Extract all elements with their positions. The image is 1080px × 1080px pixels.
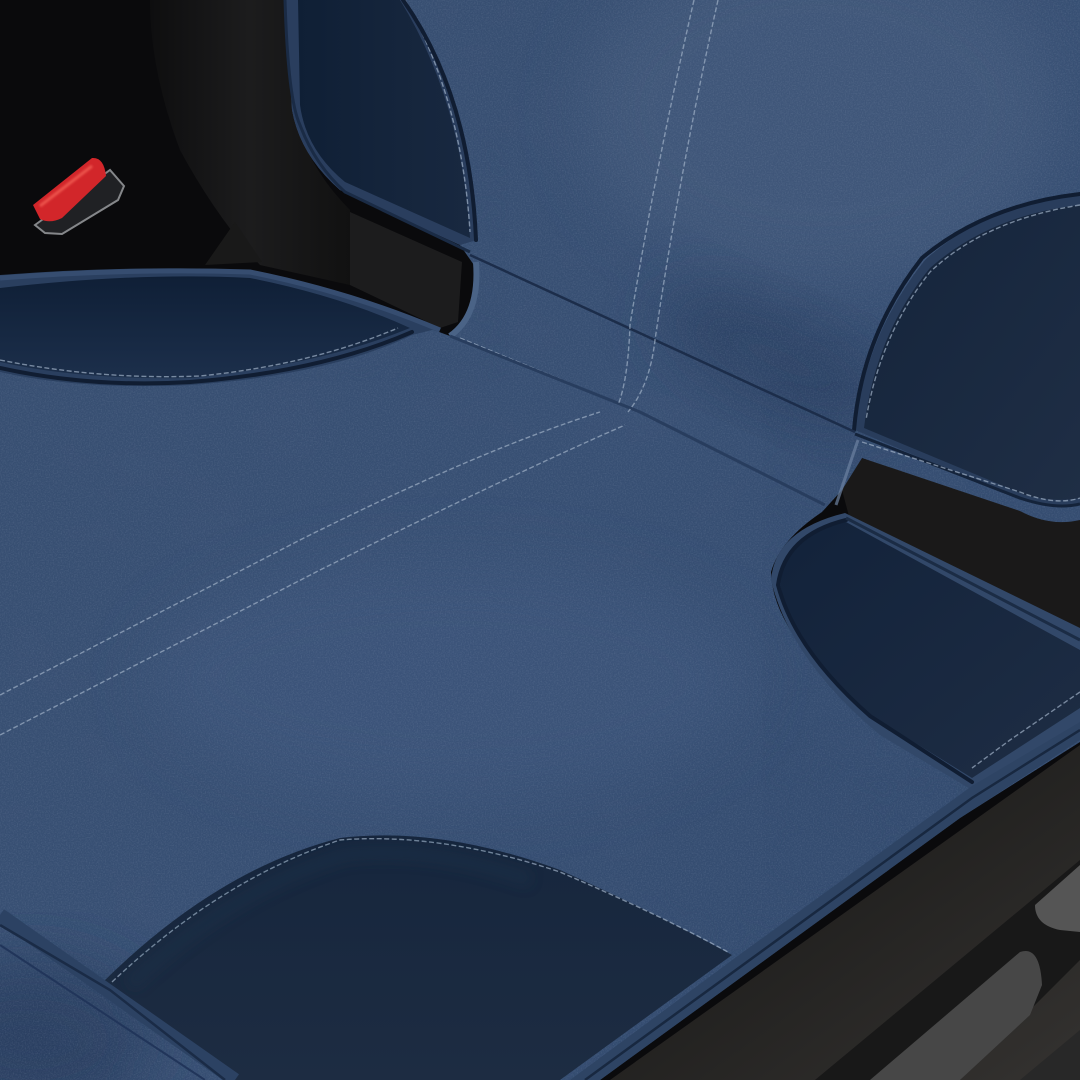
seat belt buckle	[33, 158, 124, 234]
lower right door sill and side trim	[610, 745, 1080, 1080]
horizontal seam band across seat fold	[450, 255, 858, 505]
dark gap between cover flaps	[842, 455, 1080, 640]
seat back bolster	[150, 0, 462, 328]
diagonal double stitching on seat	[0, 412, 625, 735]
upper left back leather panel	[285, 0, 477, 245]
upper right back leather panel	[854, 194, 1080, 506]
vertical double stitching on back	[618, 0, 718, 412]
front right leather panel with blue border	[771, 513, 1080, 790]
bottom centre leather panel	[100, 835, 732, 1080]
upper left leather panel	[0, 268, 440, 386]
